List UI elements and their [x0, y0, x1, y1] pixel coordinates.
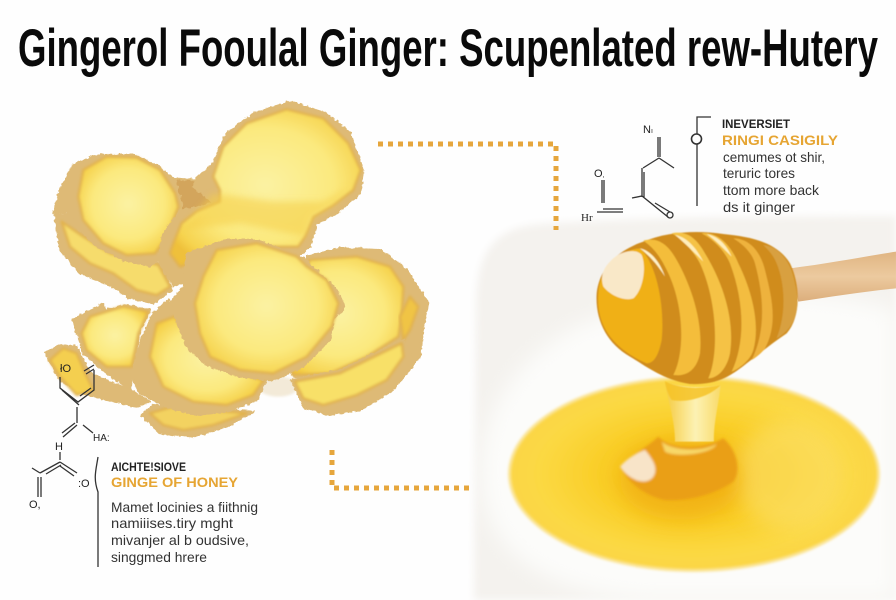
slice: upper left	[53, 155, 182, 266]
bracket: top right	[692, 117, 711, 206]
callout: bottom left: GINGE OF HONEY	[111, 474, 239, 490]
molecule labels: Nı	[643, 124, 653, 136]
callout: top right: cemumes ot shir,	[723, 149, 825, 165]
molecule labels	[29, 363, 110, 511]
honey puddle	[620, 437, 737, 500]
slice: small left	[73, 303, 150, 390]
callout: bottom left: namiiises.tiry mght	[111, 515, 233, 531]
slice: bottom centre	[142, 405, 253, 437]
molecule labels: :O	[78, 478, 90, 490]
dipper head	[597, 232, 798, 384]
dipper ribs	[598, 248, 662, 363]
callout: top right: teruric tores	[723, 165, 795, 181]
callout: bottom left: singgmed hrere	[111, 549, 207, 565]
molecule labels	[581, 124, 653, 224]
callout: top right: ds it ginger	[723, 199, 795, 215]
slice: lower left back	[55, 213, 172, 303]
molecule labels: O,	[594, 168, 605, 180]
ginger slices photo	[45, 102, 428, 437]
callout: top right	[722, 117, 839, 215]
callout: bottom left: mivanjer al b oudsive,	[111, 532, 249, 548]
molecule labels: HA:	[93, 433, 110, 444]
slice: bottom right	[292, 340, 415, 415]
bracket: bottom left	[95, 457, 98, 567]
slice: far left	[45, 345, 150, 407]
wooden stick	[790, 252, 896, 302]
molecule labels: H	[55, 441, 63, 453]
slice: right back	[273, 248, 428, 380]
callout: bottom left: Mamet locinies a fiithnig	[111, 499, 258, 515]
dotted connector: top	[378, 144, 556, 230]
slice: knob behind	[173, 178, 217, 210]
molecule labels: łO	[60, 363, 71, 375]
ginger shadow	[258, 377, 298, 397]
honey pool	[508, 376, 880, 572]
honey dipper	[597, 232, 896, 500]
callout: bottom left: AICHTE!SIOVE	[111, 460, 186, 474]
callout: bottom left	[111, 460, 258, 565]
slice: top large	[158, 102, 363, 287]
slice: centre front	[170, 240, 345, 380]
callout: top right: INEVERSIET	[722, 117, 791, 131]
panel: honey dish photo	[474, 216, 896, 600]
molecule: top right	[581, 124, 674, 224]
dotted connector: bottom	[332, 450, 472, 488]
slice: lower middle	[132, 300, 267, 415]
molecule: bottom left	[29, 363, 110, 511]
callout: top right: ttom more back	[723, 182, 820, 198]
callout: top right: RINGI CASIGILY	[722, 132, 839, 148]
molecule labels: O,	[29, 499, 41, 511]
honey stream	[665, 382, 721, 442]
molecule labels: Hr	[581, 212, 593, 224]
